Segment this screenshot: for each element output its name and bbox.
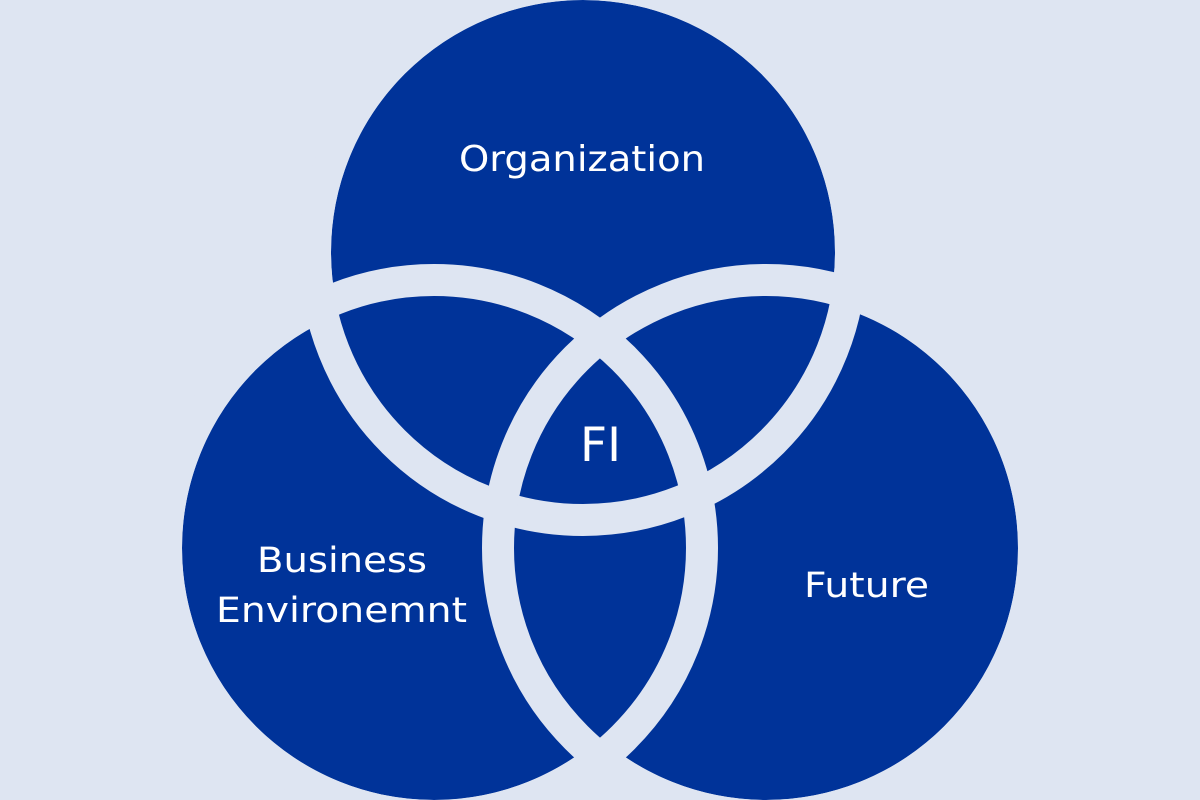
circle: future — [514, 296, 1018, 800]
label: business environment: Business — [257, 541, 427, 581]
label: FI center: FI — [580, 418, 621, 473]
label: business environment: Environemnt — [216, 591, 467, 631]
label: organization: Organization — [459, 139, 705, 180]
circle: organization — [331, 0, 835, 504]
circle: business environment — [182, 296, 686, 800]
label: business environment — [216, 541, 467, 631]
label: future: Future — [804, 566, 929, 606]
